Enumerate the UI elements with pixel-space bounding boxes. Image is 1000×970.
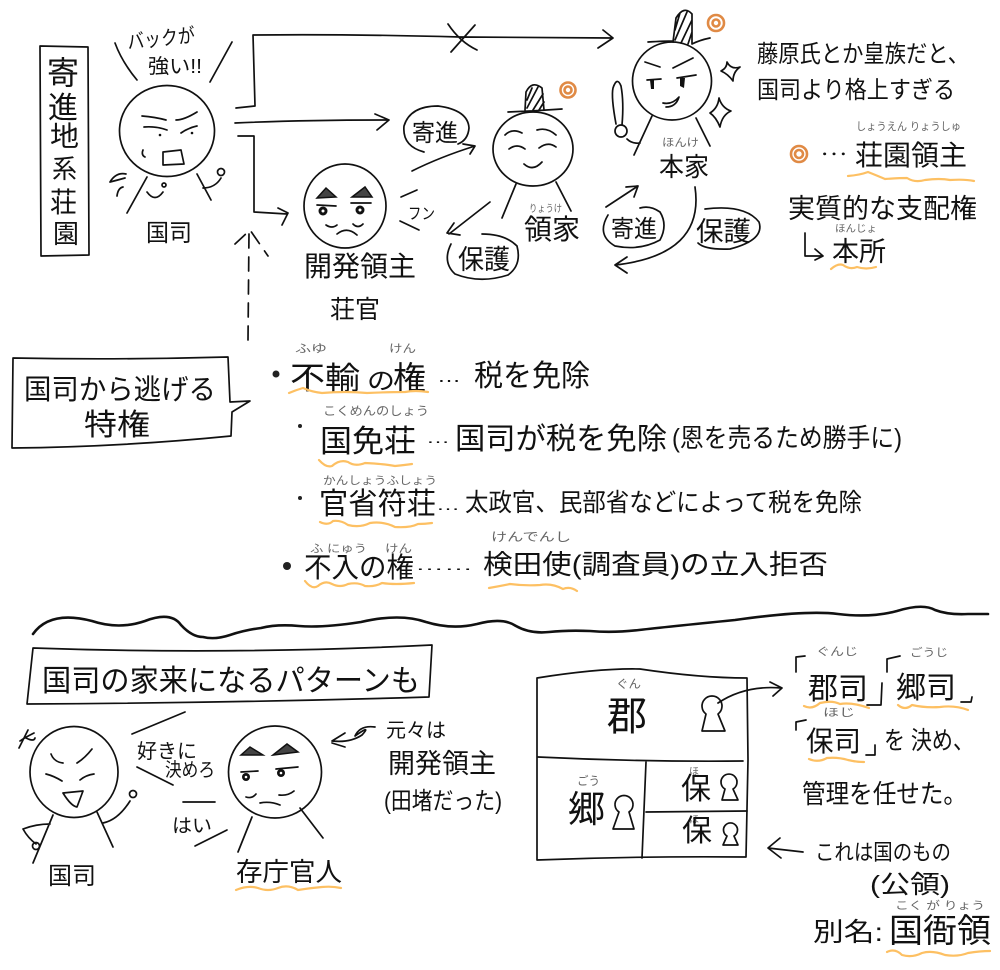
- note: 実質的な支配権: 実質的な支配権: [788, 194, 977, 224]
- character: kaihatsu ryoshu: [304, 164, 386, 248]
- diagram: koryo grid: [537, 669, 748, 860]
- note: 郡司 郷司 保司: 郡司: [808, 673, 868, 706]
- character: kokushi shouting: [110, 86, 224, 213]
- speech: 好きに決めろ: [132, 712, 215, 785]
- note: 元々は開発領主: (田堵だった): [384, 788, 502, 815]
- diagram: koryo grid: ごう: [577, 773, 600, 788]
- note: これは国のもの 公領: これは国のもの: [815, 840, 951, 865]
- arrow: squiggle to zaicho kanjin: [332, 727, 375, 747]
- bubble: 寄進 left: [404, 106, 469, 152]
- label: 領家 with furigana: りょうけ: [529, 203, 562, 215]
- character: honke: [612, 10, 740, 155]
- note: これは国のもの 公領: (公領): [870, 871, 950, 899]
- note: 郡司 郷司 保司: ごうじ: [910, 645, 948, 659]
- character: ryoke: [493, 82, 576, 218]
- panel: vertical title 寄進地系荘園: [40, 46, 89, 256]
- list item: 国免荘: [298, 404, 902, 466]
- list item: 不輸の権: の: [367, 368, 395, 395]
- arrow: hogo from ryoke: [447, 202, 490, 235]
- diagram: koryo grid: 保: [682, 815, 712, 848]
- arrow: kishin to honke: [606, 186, 638, 207]
- note: 荘園領主 key: ･･･: [820, 147, 848, 164]
- list item: 不入の権: 検田使(調査員)の立入拒否: [483, 550, 828, 580]
- character: kokushi smiling with fan: [19, 726, 136, 863]
- label: 本家 with furigana: 本家: [659, 152, 709, 182]
- label: 本家 with furigana: ほんけ: [662, 136, 699, 149]
- diagram: koryo grid: 郷: [568, 789, 605, 830]
- list item: 国免荘: こくめんのしょう: [323, 404, 429, 418]
- note: これは国のもの 公領: [815, 840, 951, 899]
- arrow: gun to gunji: [718, 682, 782, 703]
- speech: はい: はい: [172, 816, 212, 837]
- note: 別名 国衙領: [813, 898, 991, 956]
- bubble: 保護 right: [696, 208, 760, 249]
- speech: 好きに決めろ: 決めろ: [165, 759, 215, 781]
- arrow: hogo curve: [615, 187, 696, 273]
- label: 領家 with furigana: 領家: [524, 214, 580, 245]
- arrow: to ryoke: [235, 114, 389, 130]
- label: 国司: 国司: [146, 220, 192, 247]
- list item: 不輸の権: [272, 342, 590, 396]
- bubble: 保護 left: 保護: [458, 245, 510, 275]
- list item: 不入の権: [283, 530, 828, 591]
- list item: 不入の権: けんでんし: [491, 530, 571, 544]
- speech: 好きに決めろ: 好きに: [137, 740, 197, 763]
- diagram: koryo grid: 郡: [607, 695, 647, 739]
- label: 開発領主: 開発領主: [304, 251, 416, 282]
- list item: 不入の権: ……: [415, 557, 473, 573]
- callout: 国司から逃げる特権: 特権: [84, 409, 150, 442]
- arrow: dashed escape arrow: [235, 230, 268, 340]
- label: 国司 lower: 国司: [48, 863, 96, 890]
- note: 荘園領主 key: [791, 120, 974, 181]
- label: 本家 with furigana: [659, 136, 709, 182]
- panel: vertical title 寄進地系荘園: 園: [53, 219, 79, 249]
- note: 本所 with arrow: ほんじょ: [835, 223, 877, 235]
- panel: heading 国司の家来になるパターンも: 国司の家来になるパターンも: [42, 665, 420, 698]
- diagram: koryo grid: 保: [681, 773, 711, 806]
- speech: バックが強い: 強い!!: [148, 55, 202, 78]
- list item: 不入の権: ふ にゅう: [310, 542, 367, 555]
- note: 別名 国衙領: 別名:: [813, 917, 883, 947]
- arrow: crossed route to honke: [236, 24, 613, 108]
- panel: vertical title 寄進地系荘園: 荘: [50, 187, 77, 218]
- list item: 不輸の権: …: [437, 366, 461, 386]
- arrow: to kaihatsu ryoshu: [238, 136, 288, 225]
- speech: バックが強い: バックが: [126, 24, 196, 54]
- note: 本所 with arrow: [805, 223, 886, 269]
- bubble: 寄進 right: [603, 207, 664, 248]
- list item: 不輸の権: 不輸: [290, 361, 360, 396]
- note: 別名 国衙領: こく が りょう: [895, 898, 985, 912]
- diagram: koryo grid: ほ: [689, 814, 699, 826]
- note: 藤原氏: 国司より格上すぎる: [757, 77, 955, 104]
- callout: 国司から逃げる特権: 国司から逃げる: [24, 374, 216, 405]
- note: 元々は開発領主: 元々は: [386, 720, 446, 742]
- bubble: 保護 right: 保護: [696, 217, 751, 247]
- note: 郡司 郷司 保司: ほじ: [823, 706, 855, 719]
- arrow: kishin to ryoke: [412, 144, 475, 171]
- panel: vertical title 寄進地系荘園: 寄: [47, 55, 79, 91]
- list item: 不輸の権: けん: [389, 342, 416, 355]
- speech: フン: フン: [408, 206, 435, 223]
- bubble: 寄進 left: 寄進: [412, 120, 458, 147]
- speech: はい: [172, 802, 227, 846]
- panel: vertical title 寄進地系荘園: 進: [48, 92, 78, 125]
- list item: 不輸の権: 権: [393, 360, 426, 396]
- note: 元々は開発領主: 開発領主: [388, 749, 496, 779]
- note: 藤原氏: [757, 41, 969, 104]
- list item: 官省符荘: …: [436, 497, 460, 514]
- note: 郡司 郷司 保司: 保司: [806, 726, 861, 757]
- note: 郡司 郷司 保司: ぐんじ: [816, 645, 858, 658]
- callout: 国司から逃げる特権: [12, 357, 250, 448]
- note: 藤原氏: 藤原氏とか皇族だと、: [757, 41, 969, 68]
- list item: 国免荘: 国司が税を免除: [455, 423, 667, 456]
- note: 郡司 郷司 保司: 郷司: [896, 672, 956, 705]
- list item: 官省符荘: 太政官、民部省などによって税を免除: [465, 489, 862, 517]
- diagram: koryo grid: ほ: [689, 766, 699, 778]
- character: zaicho kanjin: [228, 726, 323, 852]
- note: 郡司 郷司 保司: を 決め、: [884, 727, 974, 755]
- note: 荘園領主 key: 荘園領主: [855, 140, 967, 171]
- speech: フン: [400, 190, 435, 230]
- panel: heading 国司の家来になるパターンも: [27, 645, 432, 704]
- label: 荘官: 荘官: [330, 296, 380, 324]
- list item: 不入の権: 不入の権: [304, 552, 414, 583]
- note: 荘園領主 key: しょうえん りょうしゅ: [856, 120, 961, 133]
- note: 郡司 郷司 保司: [796, 645, 974, 809]
- list item: 官省符荘: [298, 474, 862, 527]
- note: 郡司 郷司 保司: 管理を任せた。: [802, 779, 967, 809]
- list item: 国免荘: 国免荘: [320, 424, 416, 459]
- arrow: to grid: [768, 838, 803, 858]
- note: 本所 with arrow: 本所: [832, 237, 886, 267]
- label: 存庁官人: 存庁官人: [236, 857, 342, 887]
- list item: 不輸の権: ふゆ: [295, 342, 327, 355]
- list item: 官省符荘: かんしょうふしょう: [323, 474, 437, 487]
- divider: [33, 607, 988, 638]
- note: 別名 国衙領: 国衙領: [889, 912, 991, 949]
- list item: 不輸の権: 税を免除: [474, 360, 590, 393]
- bubble: 保護 left: [447, 234, 518, 279]
- list item: 国免荘: (恩を売るため勝手に): [672, 423, 902, 453]
- list item: 官省符荘: 官省符荘: [319, 488, 436, 521]
- note: 元々は開発領主: [384, 720, 502, 815]
- list item: 国免荘: …: [426, 430, 450, 447]
- panel: vertical title 寄進地系荘園: 系: [52, 154, 77, 184]
- diagram: koryo grid: ぐん: [616, 677, 641, 691]
- panel: vertical title 寄進地系荘園: 地: [50, 121, 79, 152]
- list item: 不入の権: けん: [385, 542, 412, 555]
- speech: バックが強い: [115, 24, 232, 82]
- bubble: 寄進 right: 寄進: [611, 216, 657, 243]
